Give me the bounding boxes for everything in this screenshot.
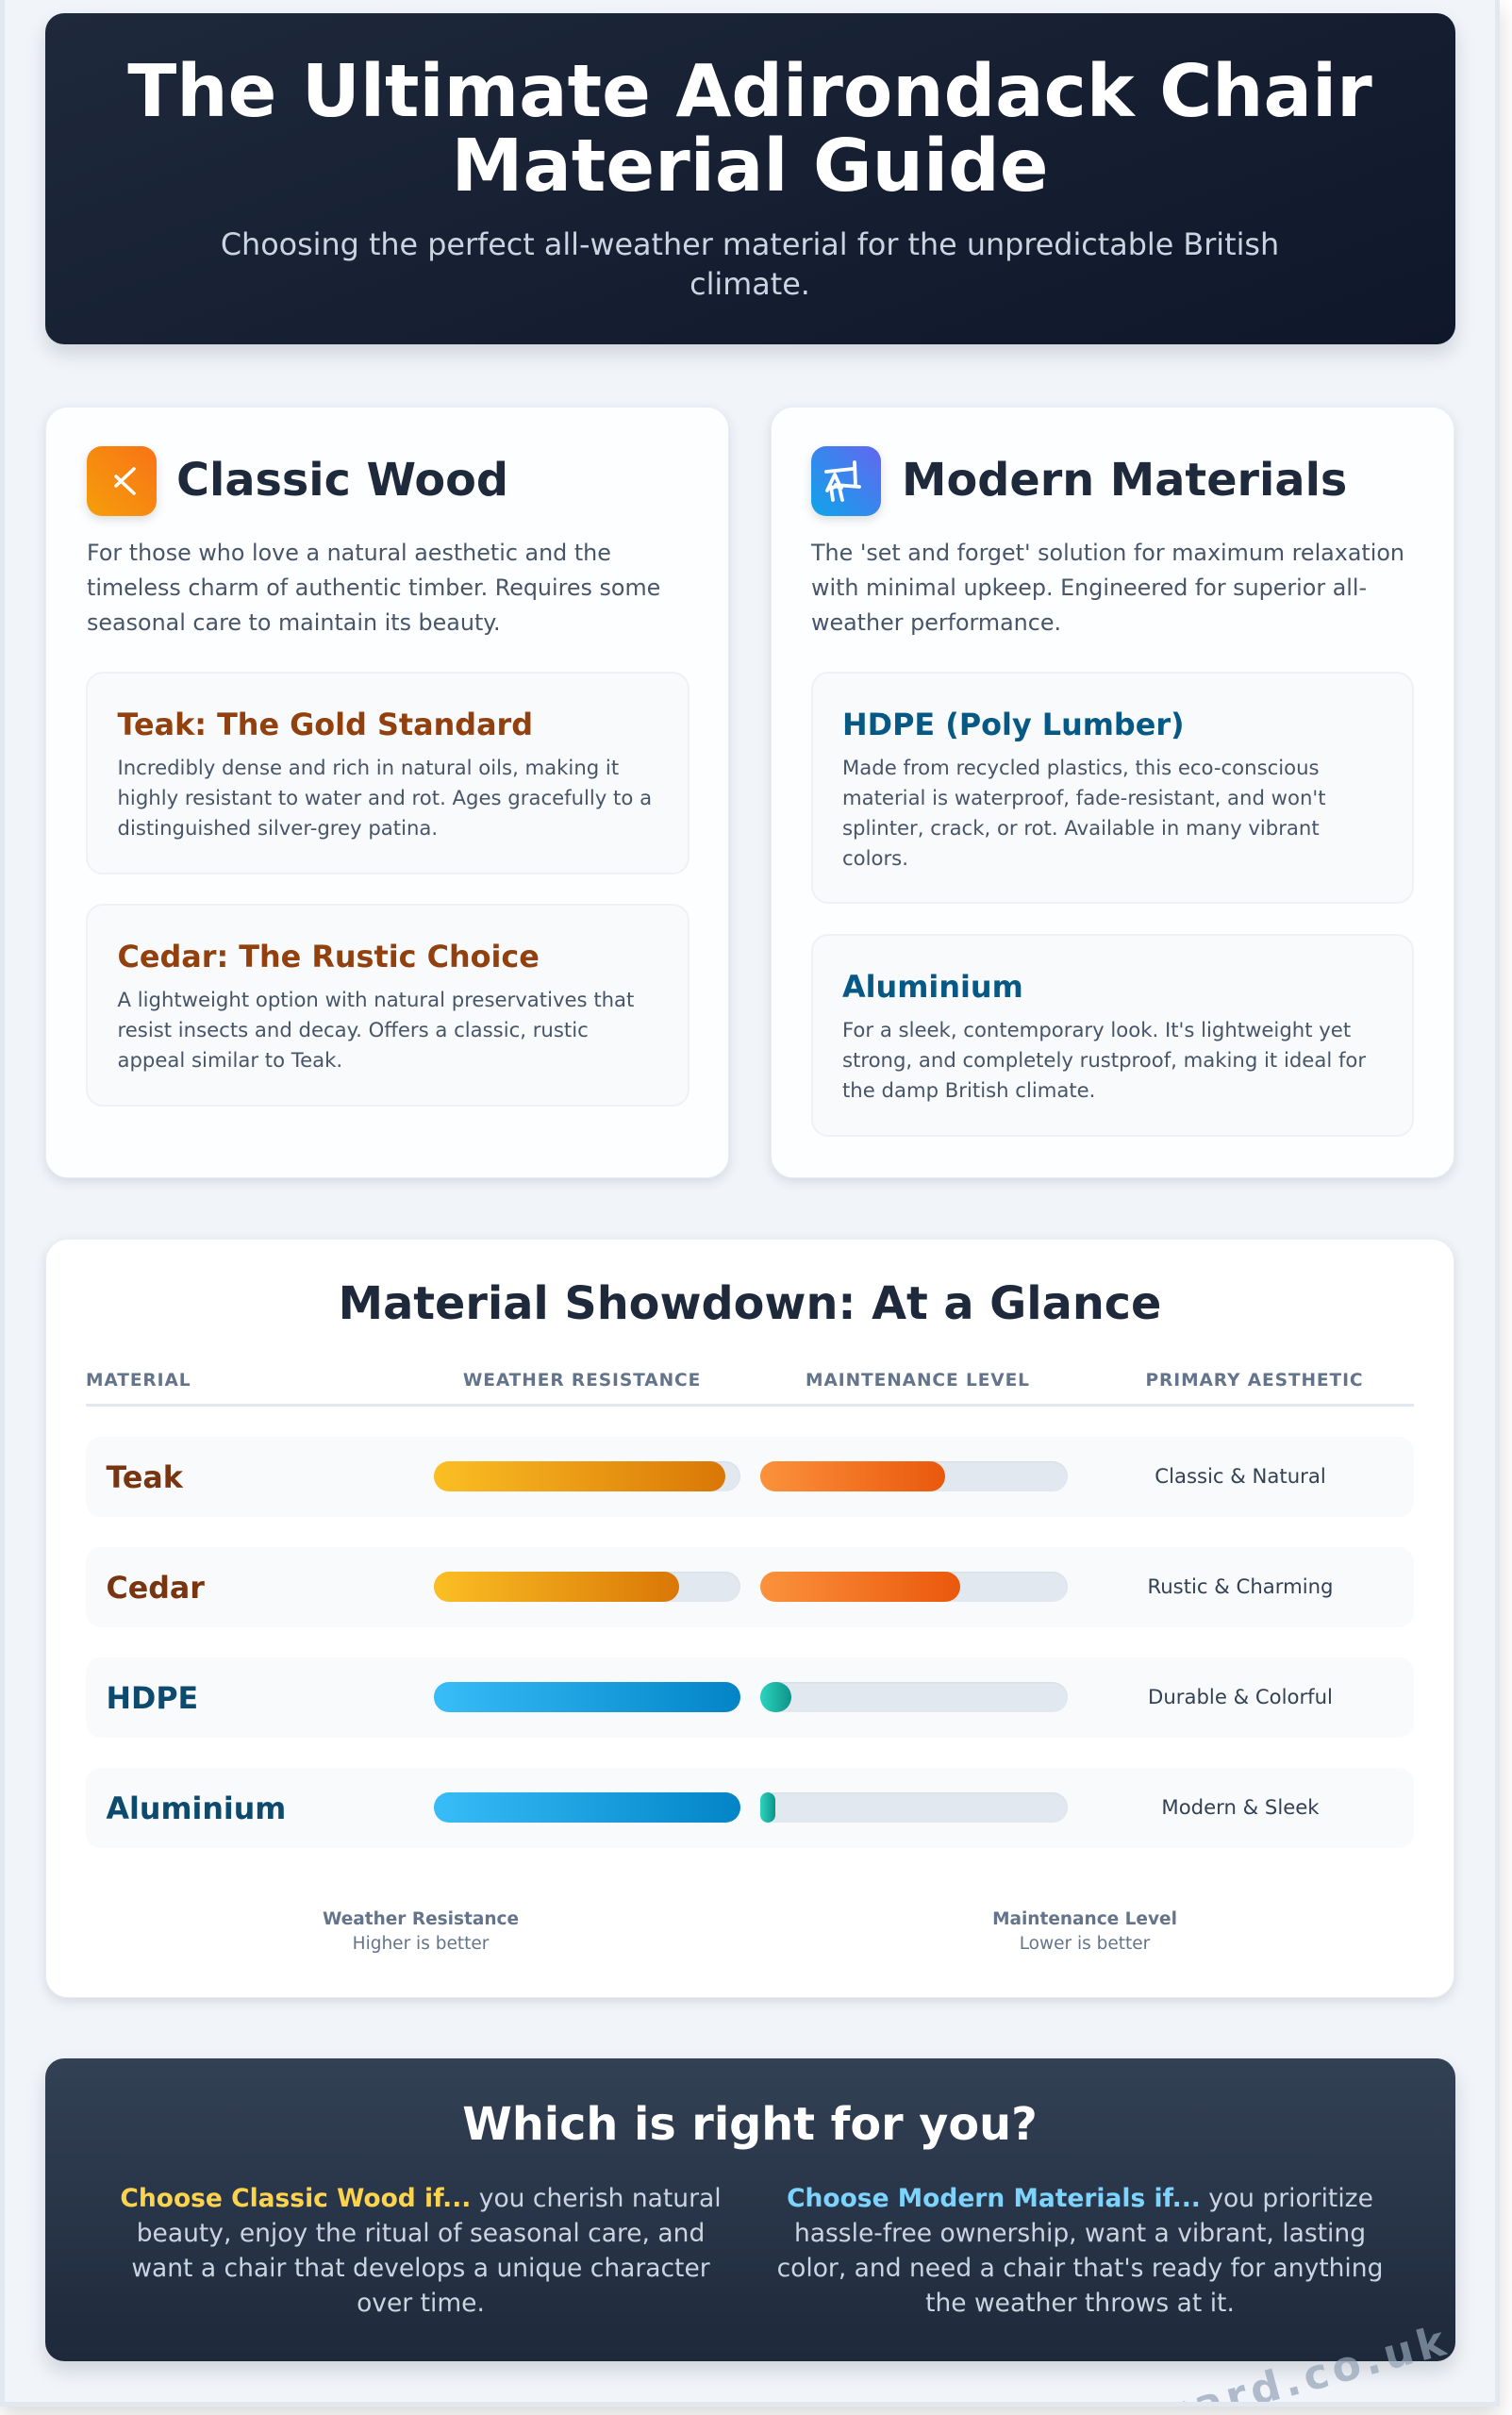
hdpe title: HDPE (Poly Lumber) [842,706,1185,741]
weather bar 95% [434,1461,740,1491]
column: weather resistance: WEATHER RESISTANCE [463,1371,701,1391]
weather bar 80% [434,1572,740,1602]
cedar title: Cedar: The Rustic Choice [117,938,540,974]
description: seasonal care to maintain its beauty. [87,609,501,636]
legend: weather resistance: Weather Resistance [323,1909,519,1929]
weather bar 100% [434,1792,740,1823]
material name: Cedar [106,1572,205,1606]
column: maintenance level: MAINTENANCE LEVEL [806,1371,1030,1391]
description: timeless charm of authentic timber. Requires some [87,575,660,601]
aluminium text: For a sleek, contemporary look. It's lightweight yet [842,1018,1351,1041]
row: teak [86,1437,1414,1517]
panel: which is right for you [45,2058,1455,2361]
title: The Ultimate Adirondack Chair [127,49,1372,133]
choose wood text: want a chair that develops a unique character [131,2254,710,2283]
hdpe text: colors. [842,846,908,870]
column: material: MATERIAL [86,1371,191,1391]
weather bar 100% [434,1682,740,1712]
choose wood text: beauty, enjoy the ritual of seasonal care, and [137,2219,705,2248]
teak text [117,756,652,840]
subtitle: Choosing the perfect all-weather material for the unpredictable British [221,227,1279,262]
description: The 'set and forget' solution for maximum relaxation [811,540,1404,566]
subtitle: climate. [690,267,810,302]
legend: weather resistance: Higher is better [353,1934,489,1954]
description [87,540,660,636]
material name: Teak [106,1460,183,1494]
sub-card: aluminium [811,934,1414,1137]
panel: modern materials [771,407,1454,1178]
aesthetic: Rustic & Charming [1147,1574,1334,1598]
cedar text: A lightweight option with natural preservatives that [117,988,634,1011]
maintenance bar 60% [760,1461,1068,1491]
hdpe text [842,756,1326,870]
material name: Aluminium [106,1792,286,1826]
aesthetic: Classic & Natural [1155,1464,1326,1488]
choose modern text: Choose Modern Materials if... you prioritize [787,2184,1373,2213]
maintenance bar 5% [760,1792,1068,1823]
teak text: highly resistant to water and rot. Ages gracefully to a [117,786,652,809]
description: weather performance. [811,609,1061,636]
choose modern text: the weather throws at it. [925,2289,1235,2318]
description: with minimal upkeep. Engineered for superior all- [811,575,1367,601]
choose modern text [777,2184,1383,2318]
material name: HDPE [106,1681,198,1715]
title: Material Guide [451,123,1049,208]
aluminium text: strong, and completely rustproof, making it ideal for [842,1048,1366,1072]
sub-card: cedar [86,904,690,1107]
row: cedar [86,1547,1414,1627]
teak text: Incredibly dense and rich in natural oils, making it [117,756,619,779]
icon: wood cross [84,446,159,523]
subtitle [221,227,1279,302]
hdpe text: splinter, crack, or rot. Available in many vibrant [842,816,1320,840]
showdown title: Material Showdown: At a Glance [339,1277,1161,1330]
aluminium text [842,1018,1366,1102]
panel: classic wood [45,407,729,1178]
aluminium title: Aluminium [842,968,1023,1004]
table header [86,1369,1414,1407]
legend: weather resistance [323,1909,519,1954]
choose wood text: Choose Classic Wood if... you cherish natural [120,2184,722,2213]
aluminium text: the damp British climate. [842,1078,1095,1102]
heading: Modern Materials [902,455,1347,507]
choose modern text: hassle-free ownership, want a vibrant, lasting [794,2219,1366,2248]
legend: maintenance level: Maintenance Level [992,1909,1177,1929]
section title: Which is right for you? [462,2098,1038,2151]
description: For those who love a natural aesthetic and the [87,540,611,566]
choose wood text [120,2184,722,2318]
hdpe text: material is waterproof, fade-resistant, and won't [842,786,1326,809]
legend: maintenance level [992,1909,1177,1954]
choose modern text: color, and need a chair that's ready for anything [777,2254,1383,2283]
icon: chair [808,446,884,523]
teak text: distinguished silver-grey patina. [117,816,438,840]
heading: Classic Wood [176,455,508,507]
description [811,540,1404,636]
row: aluminium [86,1768,1414,1848]
aesthetic: Modern & Sleek [1161,1795,1320,1819]
header panel [45,13,1455,344]
aesthetic: Durable & Colorful [1148,1685,1333,1708]
maintenance bar 65% [760,1572,1068,1602]
legend: maintenance level: Lower is better [1020,1934,1150,1954]
maintenance bar 10% [760,1682,1068,1712]
cedar text: resist insects and decay. Offers a classic, rustic [117,1018,589,1041]
choose wood text: over time. [357,2289,485,2318]
title [127,49,1372,208]
teak title: Teak: The Gold Standard [117,706,533,741]
sub-card: hdpe [811,672,1414,904]
column: primary aesthetic: PRIMARY AESTHETIC [1146,1371,1363,1391]
row: hdpe [86,1657,1414,1738]
cedar text: appeal similar to Teak. [117,1048,342,1072]
sub-card: teak [86,672,690,874]
hdpe text: Made from recycled plastics, this eco-conscious [842,756,1320,779]
cedar text [117,988,634,1072]
